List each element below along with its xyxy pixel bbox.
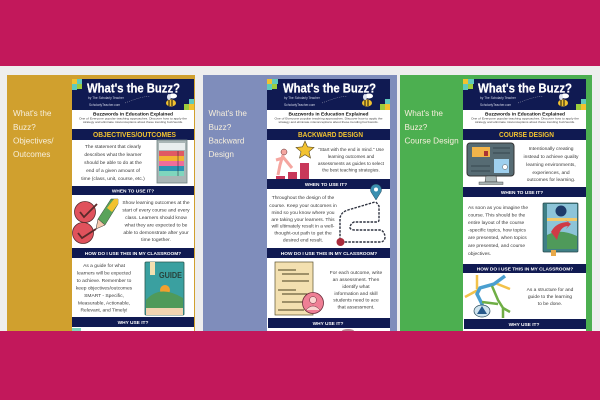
definition text: outcomes for learning. [527, 177, 575, 183]
how text: For each outcome, write [330, 270, 383, 276]
subtitle: strategy and eliminate misconceptions about these trending buzzwords. [475, 120, 575, 124]
when text: Show learning outcomes at the [122, 200, 190, 206]
when text: what they are expected to be [125, 222, 188, 228]
panel: objectives outcomes [7, 75, 195, 331]
label: objectives outcomes: Outcomes [13, 150, 50, 159]
section bar: why use it [464, 319, 586, 329]
when text: course. This should be the [468, 212, 526, 218]
section bar: why use it: WHY USE IT? [509, 322, 539, 328]
when text: able to demonstrate after your [123, 230, 189, 236]
corner accent [72, 328, 81, 331]
how text: that assessment. [338, 304, 374, 310]
when text: entire layout of the course [468, 220, 525, 226]
how text: to be done. [538, 301, 562, 307]
header banner: by The Scholarly Teacher [480, 96, 517, 100]
definition text: time (class, unit, course, etc.) [81, 176, 145, 182]
section bar: how do I use this [463, 264, 586, 273]
how text: SMART - Specific, [84, 293, 124, 299]
header banner: ScholarlyTeacher.com [284, 103, 316, 107]
definition text: should be able to do at the [84, 160, 142, 166]
header banner: ScholarlyTeacher.com [480, 103, 512, 107]
subtitle [471, 112, 579, 124]
header banner [72, 79, 194, 110]
header banner: What's the Buzz? [87, 82, 180, 96]
panel: backward design [203, 75, 397, 333]
when text: will ultimately result in a well- [272, 224, 335, 230]
label: backward design: What's the [208, 109, 247, 118]
when text: are presented, and course [468, 243, 525, 249]
bottom icon fragment [342, 329, 354, 333]
label: backward design: Design [208, 150, 234, 159]
icon: pencil and checks [72, 199, 118, 244]
infographic sheet: backward design [267, 79, 390, 333]
when text: are presented, when topics [468, 235, 527, 241]
heading: backward design: BACKWARD DESIGN [298, 132, 363, 139]
how text: information and skill [334, 291, 378, 297]
when text: class. Learners should know [125, 215, 187, 221]
how text: learners will be expected [77, 270, 131, 276]
when text: are taking your learners. This [271, 217, 335, 223]
section bar: why use it: WHY USE IT? [313, 321, 343, 327]
how text: to achieve. Remember to [77, 278, 132, 284]
subtitle: strategy and eliminate misconceptions about these trending buzzwords. [278, 120, 379, 124]
heading: objectives outcomes: OBJECTIVES/OUTCOMES [93, 132, 176, 139]
section bar: how do I use this: HOW DO I USE THIS IN MY CLASSROOM? [85, 251, 181, 257]
when text: thought-out path to get the [274, 230, 332, 236]
subtitle: Buzzwords in Education Explained [93, 112, 173, 118]
when text: -specific topics, how topics [468, 228, 526, 234]
label: objectives outcomes: Buzz? [13, 123, 36, 132]
how text: an assessment. Then [333, 277, 380, 283]
icon: computer monitor [467, 143, 514, 184]
label: course design: Buzz? [404, 123, 428, 132]
section bar: when to use it [463, 187, 586, 197]
header banner: by The Scholarly Teacher [88, 96, 125, 100]
definition text: assessments as guides to select [318, 161, 385, 166]
how text: As a structure for and [527, 287, 574, 293]
subtitle: Buzzwords in Education Explained [288, 112, 369, 118]
subtitle: Buzzwords in Education Explained [485, 112, 565, 118]
section bar: how do I use this: HOW DO I USE THIS IN MY CLASSROOM? [281, 251, 377, 257]
header banner [267, 79, 390, 110]
definition text: learning outcomes and [328, 154, 375, 159]
header banner: What's the Buzz? [283, 82, 376, 96]
icon: guide book: GUIDE [159, 270, 182, 280]
section bar: when to use it [267, 179, 390, 189]
how text: As a guide for what [83, 263, 126, 269]
panel: course design [400, 75, 592, 331]
how text: guide to the learning [528, 294, 572, 300]
label: course design: What's the [404, 109, 443, 118]
when text: As soon as you imagine the [468, 205, 528, 211]
header banner: ScholarlyTeacher.com [89, 103, 121, 107]
subtitle: One of Everyone popular teaching approaches. Discover how to apply the [471, 117, 579, 121]
icon: document with profile [275, 262, 324, 315]
how text: Relevant, and Timely! [80, 308, 128, 314]
when text: Throughout the design of the [272, 195, 335, 201]
section bar: how do I use this [267, 248, 390, 258]
top band [0, 0, 600, 66]
section bar: when to use it: WHEN TO USE IT? [305, 182, 347, 188]
when text: mind so you know where you [271, 210, 335, 216]
how text: identify what [342, 284, 370, 290]
subtitle [274, 112, 383, 124]
label: objectives outcomes: Objectives/ [13, 136, 54, 146]
when text: objectives. [468, 251, 491, 257]
section bar: when to use it: WHEN TO USE IT? [501, 190, 543, 196]
definition text: describes what the learner [84, 152, 142, 158]
icon: climbing figure and star [276, 141, 314, 179]
when text: time together. [141, 237, 171, 243]
when text: desired end result. [283, 238, 323, 244]
subtitle [79, 112, 187, 124]
definition text: Intentionally creating [529, 146, 574, 152]
bottom band [0, 331, 600, 400]
definition text: The statement that clearly [85, 144, 142, 150]
subtitle: strategy and eliminate misconceptions about these trending buzzwords. [83, 120, 183, 124]
section bar: when to use it [72, 186, 194, 195]
infographic sheet: objectives outcomes [72, 79, 194, 331]
subtitle: One of Everyone popular teaching approaches. Discover how to apply the [79, 117, 187, 121]
section bar: how do I use this: HOW DO I USE THIS IN MY CLASSROOM? [477, 266, 573, 272]
header banner: What's the Buzz? [478, 82, 572, 96]
definition text: the best teaching strategies. [322, 168, 380, 172]
section bar: why use it: WHY USE IT? [118, 320, 148, 326]
definition text: end of a given amount of [86, 168, 141, 174]
label: backward design: Backward [208, 136, 245, 146]
when text: start of every course and every [122, 208, 190, 214]
definition text: learning environments, [526, 162, 576, 168]
when text: course. Keep your outcomes in [269, 203, 337, 209]
subtitle: One of Everyone popular teaching approaches. Discover how to apply the [274, 117, 383, 121]
header banner [463, 79, 586, 110]
definition text: instead to achieve quality [524, 154, 579, 160]
definition text: experiences, and [532, 170, 570, 176]
icon: guide book [145, 262, 184, 315]
section bar: why use it [268, 318, 390, 328]
icon: dashed path with pin [336, 184, 385, 246]
how text: Measurable, Actionable, [78, 300, 130, 306]
heading: course design: COURSE DESIGN [499, 132, 554, 139]
how text: keep objectives/outcomes [76, 286, 133, 292]
section bar: how do I use this [72, 248, 194, 258]
heading: objectives outcomes [72, 129, 194, 140]
header banner: by The Scholarly Teacher [284, 96, 321, 100]
section bar: why use it [72, 317, 194, 327]
heading: backward design [267, 129, 390, 140]
infographic sheet: course design [463, 79, 586, 331]
heading: course design [463, 129, 586, 140]
label: course design: Course Design [404, 136, 459, 146]
label: backward design: Buzz? [208, 123, 232, 132]
label: objectives outcomes: What's the [13, 109, 52, 118]
icon: checklist [157, 140, 187, 183]
how text: students need to ace [333, 298, 379, 304]
icon: road map [465, 275, 510, 318]
definition text: "Start with the end in mind." Use [318, 147, 384, 152]
icon: atlas book [543, 203, 578, 256]
section bar: when to use it: WHEN TO USE IT? [112, 188, 154, 194]
